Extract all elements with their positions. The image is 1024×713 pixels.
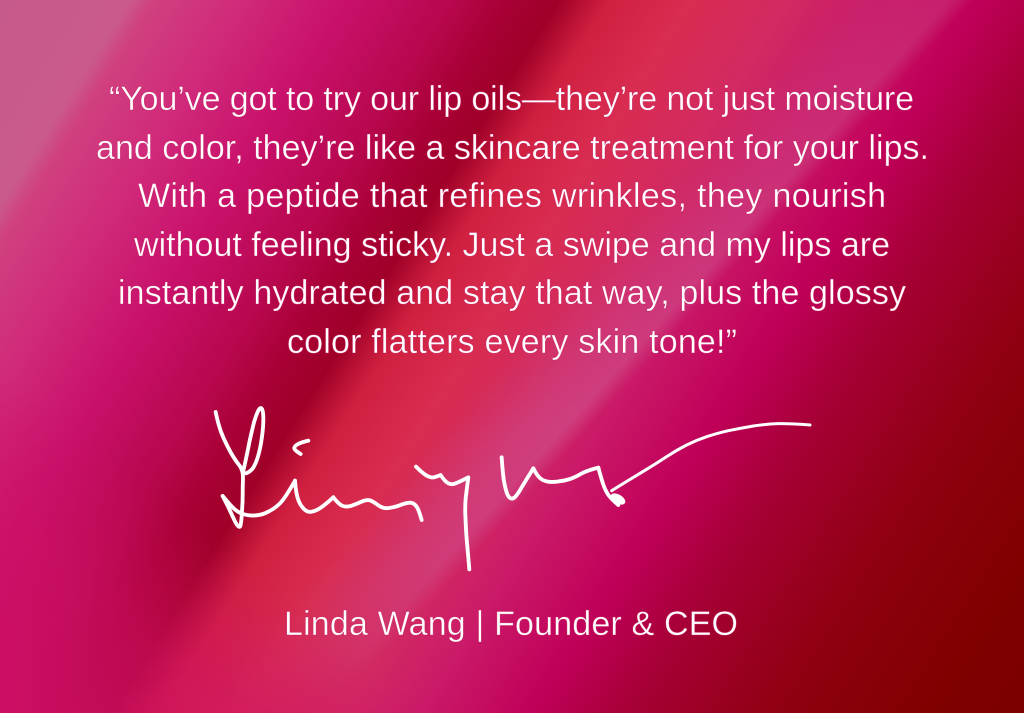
quote text: without feeling sticky. Just a swipe and my lips are (133, 226, 890, 264)
quote text: color flatters every skin tone!” (287, 323, 737, 361)
quote text: instantly hydrated and stay that way, plus the glossy (118, 274, 906, 312)
attribution: Linda Wang | Founder & CEO (284, 605, 738, 643)
quote text: “You’ve got to try our lip oils—they’re not just moisture (109, 80, 914, 118)
quote text: With a peptide that refines wrinkles, they nourish (138, 177, 886, 215)
quote text: and color, they’re like a skincare treatment for your lips. (96, 129, 929, 167)
